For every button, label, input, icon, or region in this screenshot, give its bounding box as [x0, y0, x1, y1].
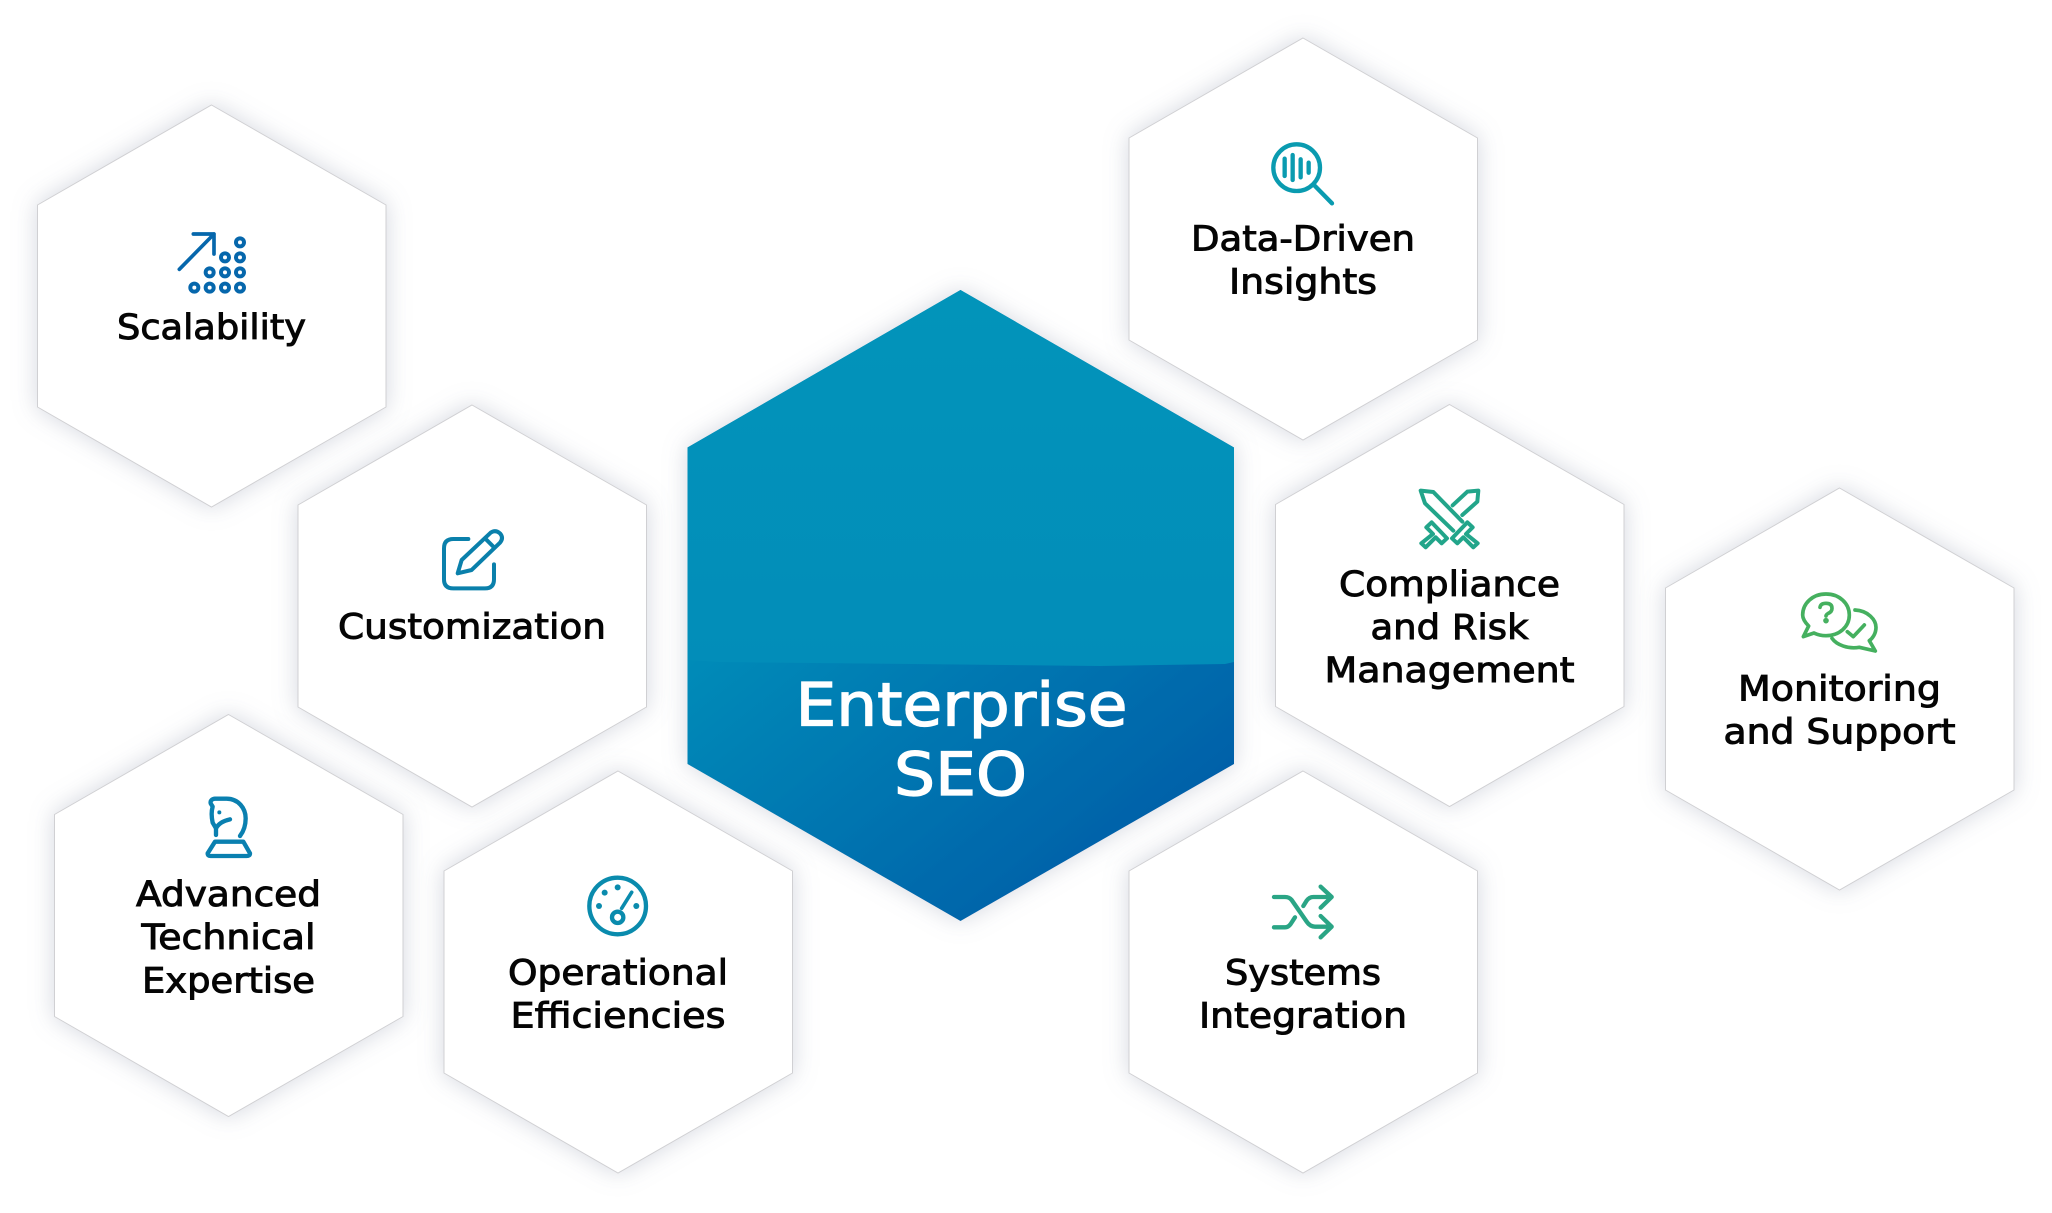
label: Monitoring and Support: and Support: [1724, 712, 1956, 752]
label: Compliance and Risk Management: [1324, 565, 1574, 691]
label: Data-Driven Insights: Insights: [1229, 262, 1377, 302]
panel: advanced technical expertise: [54, 714, 403, 1116]
label: Advanced Technical Expertise: Advanced: [136, 875, 321, 915]
icon: chat bubbles: [1803, 594, 1876, 651]
label: Systems Integration: Systems: [1225, 954, 1381, 994]
label: Enterprise SEO: Enterprise: [796, 670, 1128, 740]
label: Scalability: Scalability: [117, 308, 306, 348]
panel: central hexagon Enterprise SEO: [688, 290, 1234, 921]
label: Operational Efficiencies: Efficiencies: [510, 996, 726, 1036]
icon: edit pencil: [444, 531, 502, 588]
label: Monitoring and Support: [1724, 670, 1956, 752]
panel: scalability: [38, 105, 386, 507]
label: Monitoring and Support: Monitoring: [1738, 670, 1941, 710]
label: Enterprise SEO: SEO: [894, 740, 1027, 810]
label: Systems Integration: [1199, 954, 1407, 1036]
label: Advanced Technical Expertise: [136, 875, 321, 1002]
icon: magnifier with sound bars: [1273, 144, 1332, 203]
panel: monitoring and support: [1666, 488, 2014, 890]
label: Customization: Customization: [338, 608, 606, 648]
label: Enterprise SEO: [796, 670, 1128, 810]
label: Data-Driven Insights: Data-Driven: [1191, 220, 1415, 260]
label: Data-Driven Insights: [1191, 220, 1415, 302]
icon: shuffle arrows: [1274, 887, 1332, 937]
label: Operational Efficiencies: [508, 954, 728, 1036]
label: Compliance and Risk Management: and Risk: [1370, 608, 1529, 648]
label: Systems Integration: Integration: [1199, 996, 1407, 1036]
panel: systems integration: [1129, 771, 1478, 1173]
icon: chess knight: [208, 799, 250, 856]
panel: customization: [298, 405, 646, 807]
panel: compliance and risk management: [1276, 404, 1624, 806]
label: Advanced Technical Expertise: Expertise: [142, 962, 315, 1002]
label: Operational Efficiencies: Operational: [508, 954, 728, 994]
panel: operational efficiencies: [444, 771, 792, 1173]
label: Compliance and Risk Management: Management: [1324, 651, 1574, 691]
icon: gauge: [589, 878, 646, 934]
label: Compliance and Risk Management: Compliance: [1339, 565, 1560, 605]
label: Advanced Technical Expertise: Technical: [140, 918, 316, 958]
icon: arrow and dots: [179, 234, 244, 292]
panel: data-driven insights: [1129, 38, 1478, 440]
icon: crossed swords: [1421, 491, 1478, 547]
